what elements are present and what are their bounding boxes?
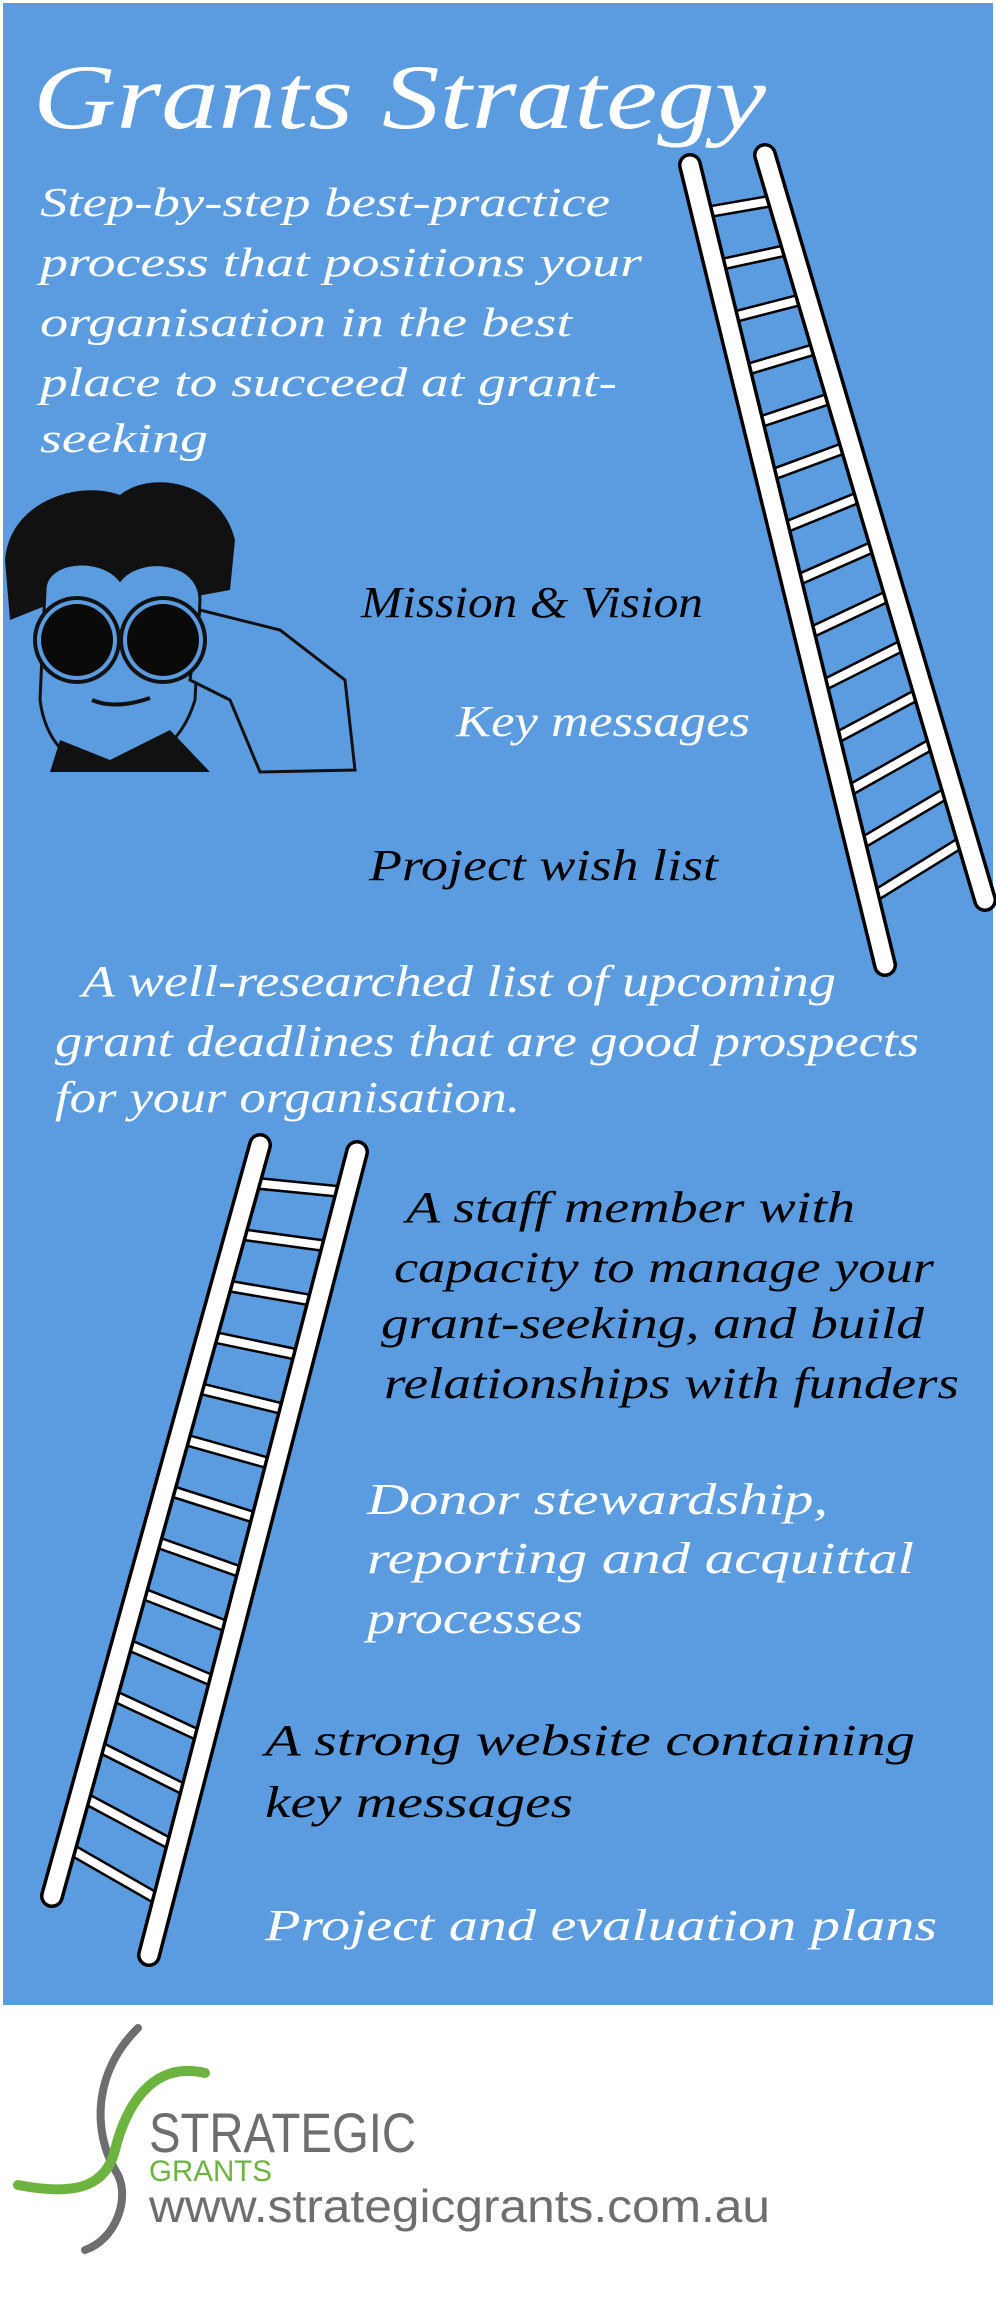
- title: Grants Strategy: [33, 46, 766, 148]
- logo: GRANTS: [149, 2155, 272, 2188]
- text: staff member: A staff member with: [402, 1183, 855, 1232]
- text: donor stewardship: Donor stewardship,: [366, 1475, 828, 1524]
- subtitle text block: organisation in the best: [40, 299, 574, 345]
- text: Project wish list: Project wish list: [368, 841, 720, 890]
- text: donor stewardship: [363, 1475, 914, 1643]
- icon: ladder bottom left: [52, 1145, 357, 1955]
- logo: www.strategicgrants.com.au: [148, 2180, 770, 2232]
- logo: [18, 2028, 770, 2250]
- icon: logo swirl: [18, 2028, 205, 2250]
- text: staff member: relationships with funders: [384, 1359, 959, 1408]
- text: staff member: grant-seeking, and build: [381, 1299, 925, 1348]
- text: grant deadlines: for your organisation.: [55, 1073, 520, 1122]
- icon: ladder top right: [690, 155, 985, 965]
- subtitle text block: Step-by-step best-practice: [40, 179, 610, 225]
- text: staff member: capacity to manage your: [394, 1243, 935, 1292]
- subtitle text block: seeking: [40, 415, 208, 461]
- text: Key messages: Key messages: [455, 697, 750, 746]
- text: Mission & Vision: Mission & Vision: [360, 578, 703, 627]
- text: staff member: [381, 1183, 959, 1408]
- subtitle text block: [36, 179, 643, 461]
- text: grant deadlines: [55, 957, 919, 1122]
- text: grant deadlines: grant deadlines that are good prospects: [55, 1017, 919, 1066]
- subtitle text block: place to succeed at grant-: [36, 359, 617, 405]
- subtitle text block: process that positions your: [36, 239, 643, 285]
- text: donor stewardship: reporting and acquittal: [367, 1534, 914, 1583]
- text: grant deadlines: A well-researched list of upcoming: [78, 957, 836, 1006]
- text: project and evaluation plans: Project and evaluation plans: [264, 1901, 937, 1950]
- text: strong website: [261, 1716, 915, 1827]
- logo text: STRATEGIC: [149, 2101, 416, 2164]
- text: donor stewardship: processes: [363, 1594, 583, 1643]
- text: strong website: A strong website containing: [261, 1716, 915, 1765]
- icon: woman with binoculars: [5, 482, 355, 772]
- text: strong website: key messages: [265, 1778, 573, 1827]
